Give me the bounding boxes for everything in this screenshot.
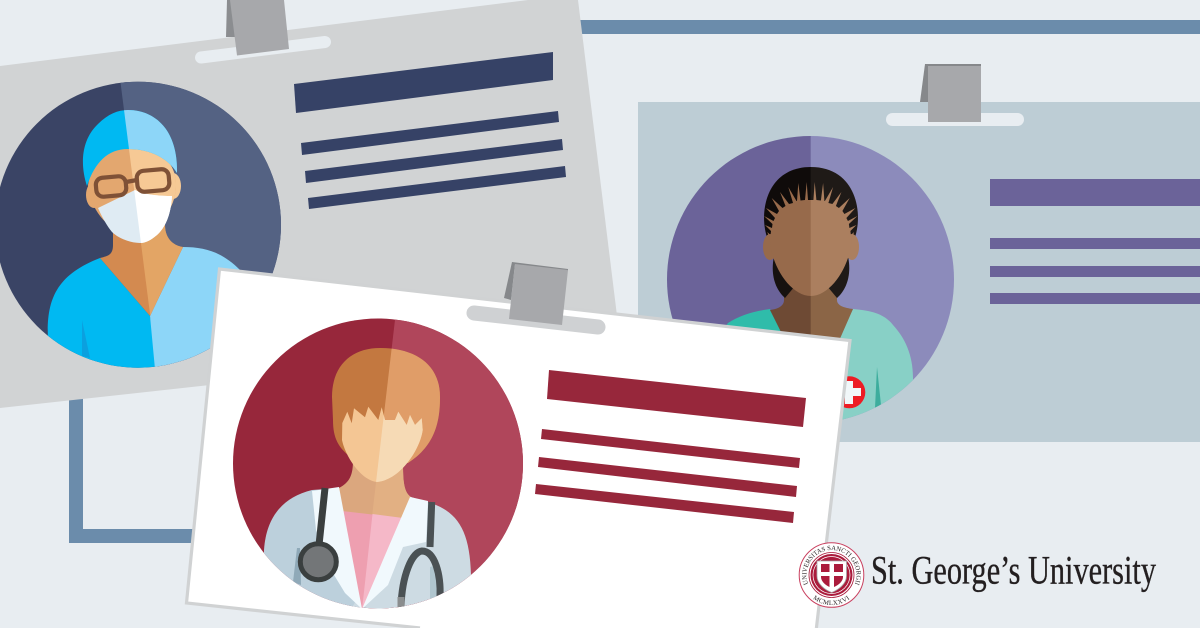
seal lettering <box>802 546 861 606</box>
icon: red cross badge <box>844 376 866 408</box>
badge slot <box>474 313 598 327</box>
badge card <box>186 269 850 628</box>
portrait: nurse in green scrubs <box>667 136 954 420</box>
panel: blue ID badge <box>638 64 1200 442</box>
logo: St. George's University <box>798 542 1156 608</box>
badge clip <box>920 64 981 122</box>
icon: university seal <box>798 542 864 608</box>
icon: stethoscope <box>300 488 440 610</box>
text placeholder bars <box>990 179 1200 304</box>
seal lettering: MCMLXXVI <box>813 595 850 606</box>
panel: white ID badge <box>186 262 850 628</box>
seal lettering: UNIVERSITAS SANCTI GEORGII <box>802 546 861 586</box>
badge border <box>186 269 850 628</box>
badge clip <box>226 0 289 56</box>
portrait: surgeon with mask <box>0 82 281 368</box>
badge slot <box>201 42 325 58</box>
portrait: doctor with stethoscope <box>230 315 530 620</box>
icon: glasses <box>95 169 170 197</box>
top wall rail <box>570 20 1200 34</box>
badge slot <box>886 113 1024 126</box>
left bracket <box>69 380 215 543</box>
shield <box>817 561 846 592</box>
panel: grey ID badge <box>0 0 620 408</box>
badge card <box>0 0 620 408</box>
badge card <box>638 102 1200 442</box>
badge clip <box>504 262 568 325</box>
text placeholder bars <box>294 52 566 209</box>
text placeholder bars <box>535 370 806 523</box>
